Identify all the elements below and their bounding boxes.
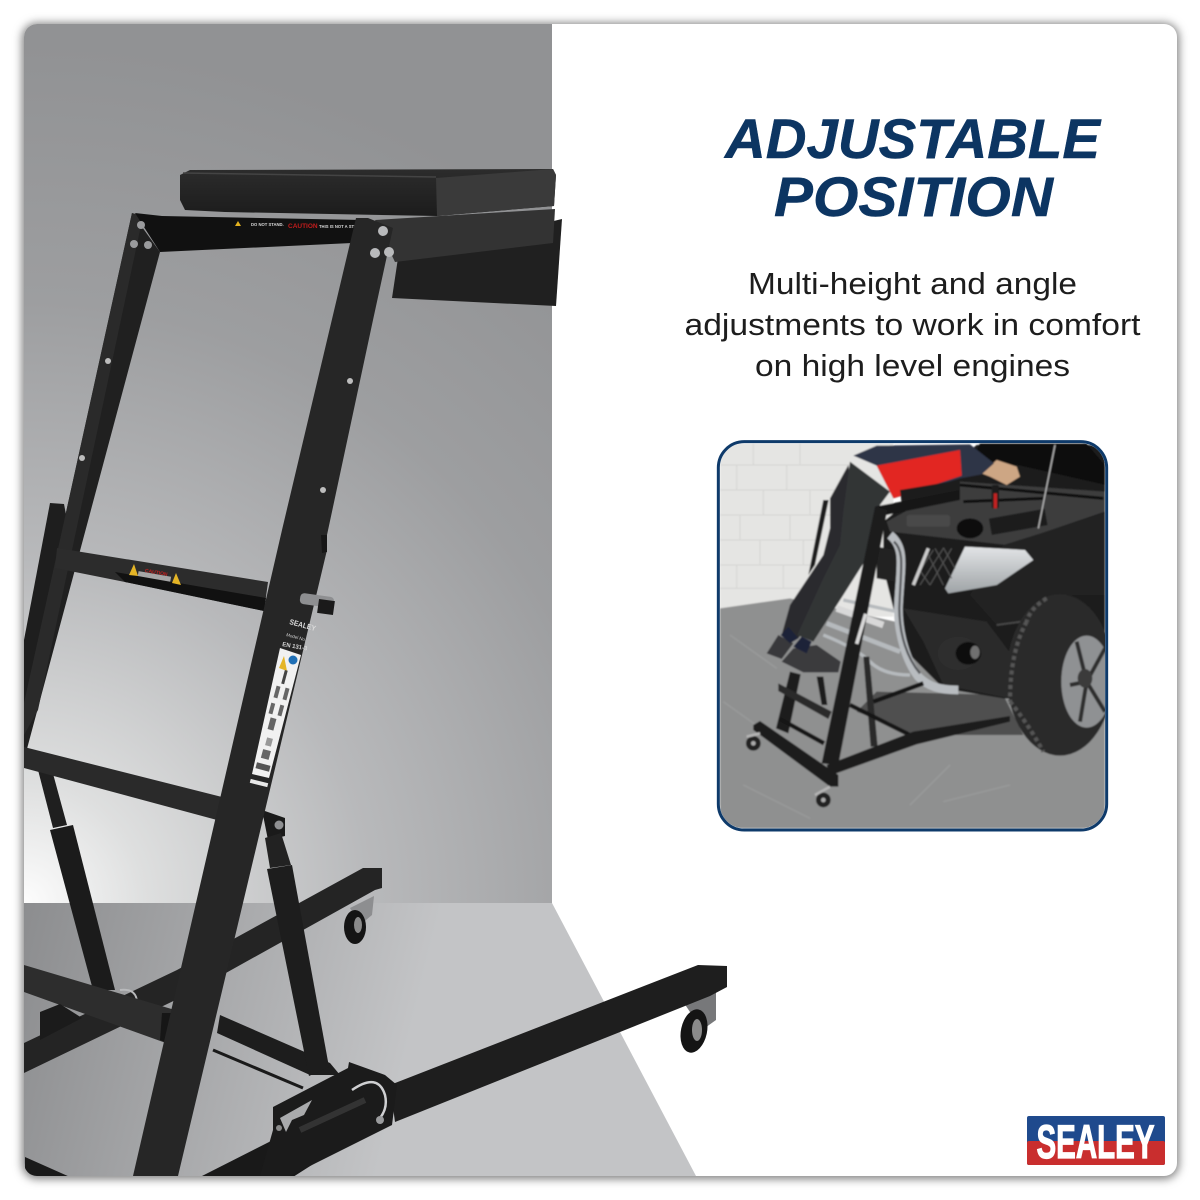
shirt [853, 444, 994, 498]
heading: ADJUSTABLE [723, 107, 1102, 170]
headlight [945, 547, 1033, 593]
inset photo border [718, 442, 1107, 830]
bar clip rear [120, 988, 138, 999]
locking pin [299, 593, 335, 615]
rear caster [344, 896, 374, 944]
front caster [680, 992, 716, 1053]
description text: on high level engines [755, 348, 1070, 383]
warning label on top bar: CAUTION [288, 223, 318, 230]
right head bolts [370, 226, 394, 258]
left bracket [40, 1004, 82, 1040]
arm [982, 460, 1020, 485]
warning label on top bar: THIS IS NOT A STEP [319, 224, 360, 229]
rear ladder rail [24, 213, 160, 760]
leg sticker: model info: Model No. [286, 632, 307, 642]
fog lamp [938, 637, 981, 670]
leg sticker: model info: EN 131-3 [282, 642, 308, 652]
lower bracket and clip [270, 1062, 395, 1166]
cushion pad [180, 169, 556, 216]
engine details [907, 445, 1055, 538]
rear base tube [24, 868, 382, 1073]
pad bracket extension [375, 209, 555, 262]
panel: product scene [24, 24, 727, 1177]
front ladder leg [133, 218, 393, 1176]
screwdriver [992, 485, 999, 508]
near leg [797, 462, 890, 642]
front base tube [390, 965, 727, 1122]
leg sticker: model info: SEALEY [288, 618, 317, 633]
top cross bar [135, 213, 362, 252]
caution sticker: CAUTION [144, 568, 168, 578]
right strut [262, 810, 329, 1076]
garage floor [720, 598, 1105, 828]
socks [781, 627, 812, 653]
alloy wheel [1061, 636, 1112, 728]
chrome bull bar [890, 535, 958, 690]
mechanic [767, 444, 1020, 672]
heading [723, 107, 1102, 228]
lower grille chrome [823, 600, 910, 675]
grey studio wall [24, 24, 552, 904]
inset creeper [746, 490, 1010, 807]
near shoe [782, 645, 841, 672]
left head bolts [130, 221, 152, 249]
caution sticker [129, 564, 181, 585]
shadow under truck [857, 692, 1023, 735]
far shoe [767, 635, 793, 659]
heading: POSITION [774, 165, 1055, 228]
rung lower [24, 747, 222, 820]
inset cushion [900, 480, 960, 503]
description text: Multi-height and angle [748, 266, 1077, 301]
rear left gas strut [38, 770, 115, 990]
far leg [782, 465, 857, 638]
leg sticker: model info [282, 619, 316, 650]
truck body [883, 443, 1105, 702]
description text [684, 266, 1141, 383]
rear sleeve [24, 503, 67, 712]
inset casters [746, 736, 761, 751]
grille [877, 547, 957, 585]
inset photo: mechanic using the creeper on a truck [718, 442, 1113, 830]
description text: adjustments to work in comfort [684, 307, 1141, 342]
corner piece [25, 1157, 68, 1176]
rear ladder legs [776, 500, 829, 733]
pouch under pad [392, 219, 562, 306]
garage wall [720, 443, 893, 617]
warning label on top bar [235, 221, 354, 228]
warning label on top bar: DO NOT STAND. [251, 222, 284, 227]
leg sticker: safety pictograms [250, 648, 301, 787]
rear bar [24, 965, 172, 1042]
grey studio floor [24, 903, 696, 1176]
thin rod [213, 1050, 303, 1088]
front tyre [1007, 594, 1113, 756]
cross strut [217, 1015, 340, 1075]
rung upper [55, 548, 268, 611]
product: adjustable creeper frame [24, 169, 727, 1177]
